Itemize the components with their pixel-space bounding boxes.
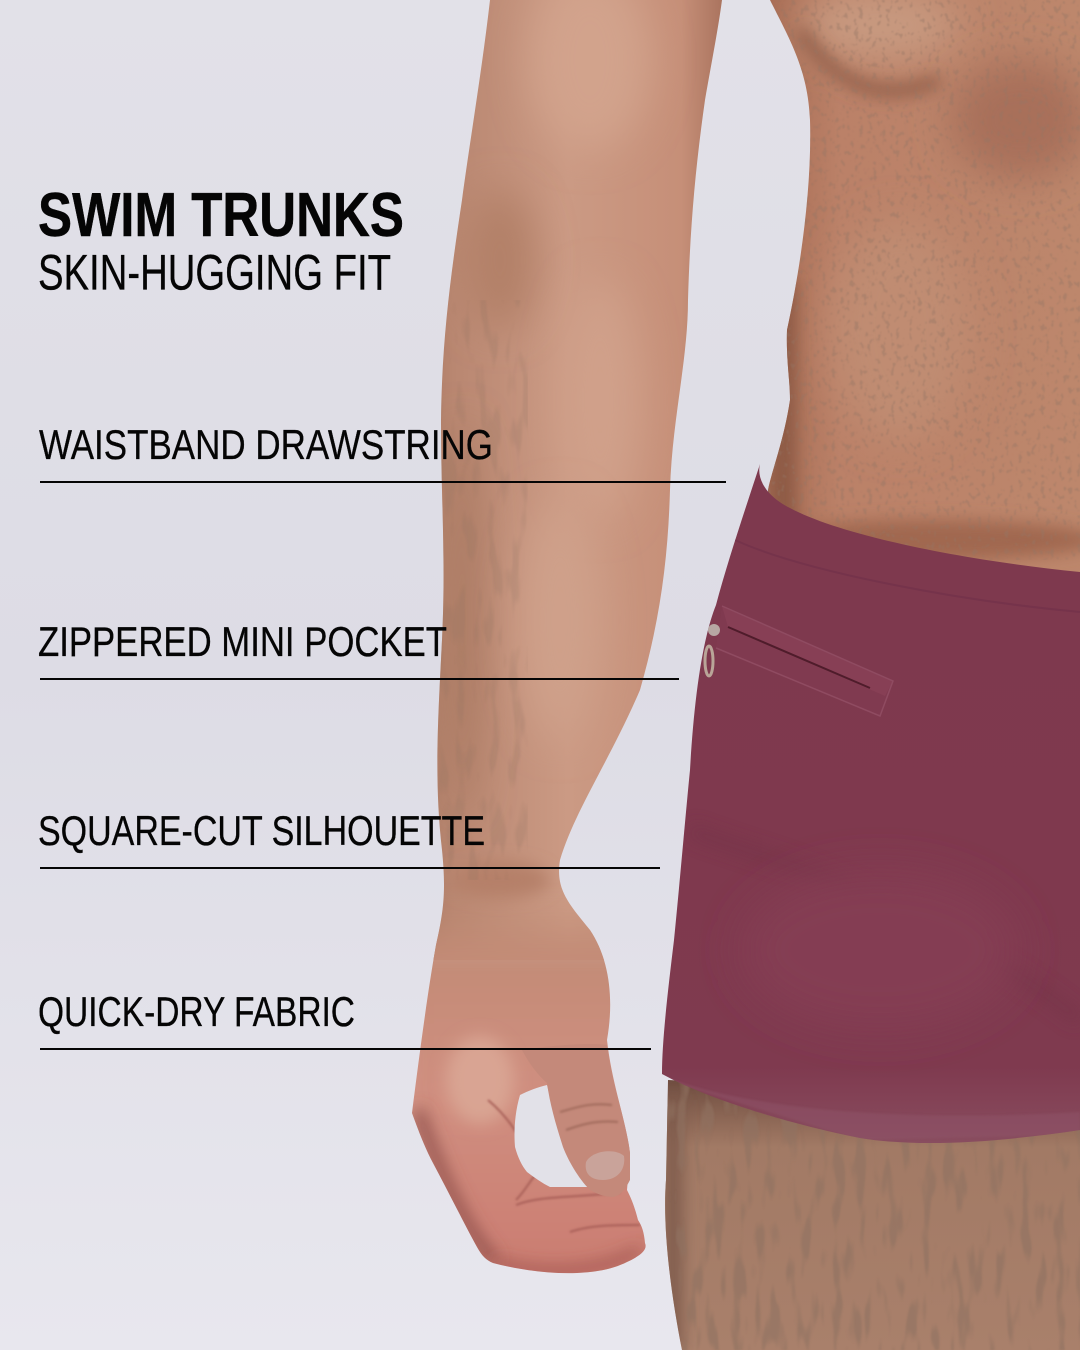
label: quick-dry fabric: QUICK-DRY FABRIC — [38, 988, 355, 1035]
thumb — [522, 1044, 630, 1197]
title — [38, 181, 404, 300]
label: square-cut silhouette: SQUARE-CUT SILHOUETTE — [38, 807, 485, 854]
label: zippered mini pocket: ZIPPERED MINI POCKET — [38, 618, 447, 665]
photo: torso — [768, 0, 1080, 572]
title: SWIM TRUNKS — [38, 181, 404, 250]
photo: swim trunks — [655, 460, 1080, 1150]
photo: leg — [660, 1080, 1080, 1350]
subtitle: SKIN-HUGGING FIT — [38, 244, 391, 300]
label: waistband drawstring: WAISTBAND DRAWSTRING — [39, 421, 493, 468]
hand gap — [515, 1085, 592, 1187]
thumbnail — [586, 1151, 624, 1180]
thumb creases — [560, 1104, 618, 1130]
photo: arm and hand — [412, 0, 722, 1274]
zipper pull — [705, 624, 720, 676]
zippered pocket — [716, 606, 893, 716]
